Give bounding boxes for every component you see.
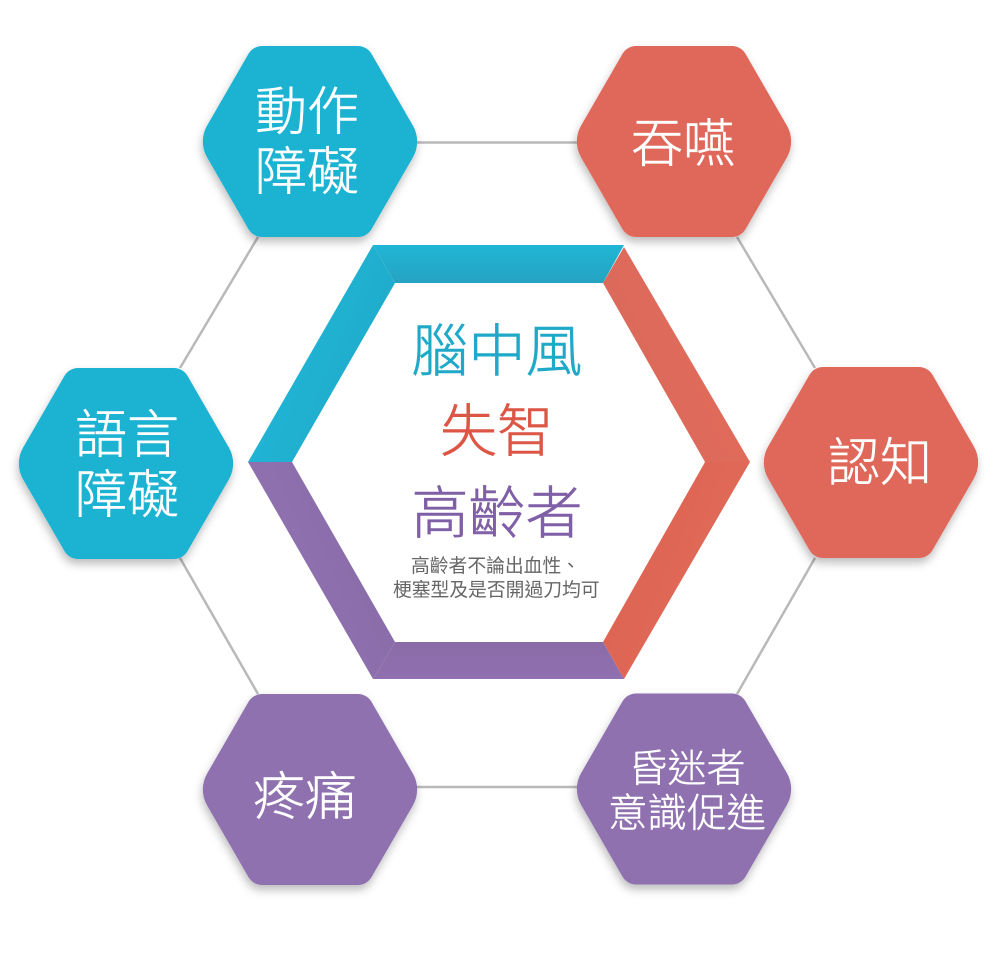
hexagon: 認知 — [764, 367, 978, 558]
connector lines between hexagons — [180, 142, 815, 787]
hexagon: 吞嚥: 吞嚥 — [631, 116, 735, 174]
hexagon: 語言障礙: 語言 — [75, 407, 179, 465]
hexagon: 疼痛: 疼痛 — [253, 769, 357, 827]
central heading: 高齡者: 高齡者 — [412, 482, 582, 546]
central note: 高齡者不論出血性、 — [411, 555, 580, 576]
hexagon: 動作障礙 — [203, 46, 417, 237]
hexagon: 動作障礙: 動作 — [255, 84, 359, 142]
hexagon: 認知: 認知 — [828, 435, 932, 493]
central heading: 失智: 失智 — [440, 400, 554, 464]
central heading: 腦中風: 腦中風 — [412, 320, 582, 384]
central hexagon ring — [248, 245, 750, 679]
hexagon: 昏迷者意識促進: 意識促進 — [608, 792, 766, 836]
hexagon: 動作障礙: 障礙 — [255, 144, 359, 202]
central note: 梗塞型及是否開過刀均可 — [393, 579, 600, 600]
central note — [393, 555, 600, 600]
hexagon: 吞嚥 — [577, 46, 791, 237]
hexagon: 語言障礙 — [19, 368, 233, 559]
hexagon: 語言障礙: 障礙 — [75, 467, 179, 525]
hexagon: 昏迷者意識促進 — [577, 694, 791, 884]
hexagon: 疼痛 — [203, 694, 417, 885]
hexagon: 昏迷者意識促進: 昏迷者 — [628, 748, 746, 791]
